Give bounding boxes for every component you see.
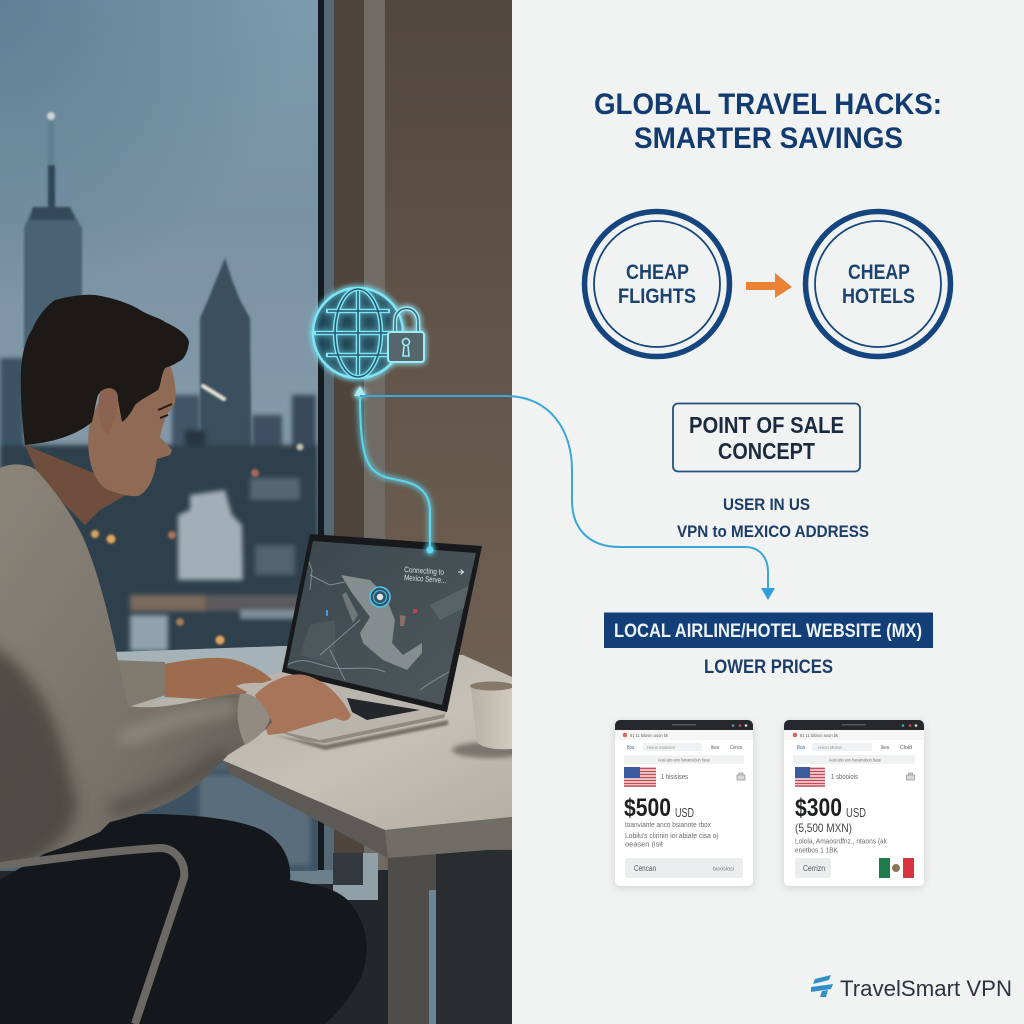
navigation row: Hoion Moitos — [818, 745, 843, 750]
map pins — [326, 609, 417, 626]
card: Mexico price — [784, 720, 924, 886]
head and face — [88, 364, 175, 496]
pale building — [130, 478, 315, 651]
browser bar — [784, 720, 924, 740]
flight detail: 1 sbooiois — [831, 774, 858, 781]
flight detail: 1 hisisises — [661, 774, 688, 781]
circle: cheap flights: CHEAP — [626, 261, 689, 284]
navigation row: Boa — [627, 745, 635, 751]
navigation row: Ikea — [881, 745, 890, 751]
fare description: Lobilu's clirinin ioi abiate cisa oj — [625, 831, 718, 840]
peso price: (5,500 MXN) — [795, 821, 852, 835]
text: user in US, VPN to Mexico address: VPN to MEXICO ADDRESS — [677, 522, 869, 541]
sweater shading — [0, 640, 235, 880]
status text — [404, 566, 446, 583]
laptop screen bezel — [282, 534, 482, 712]
navigation row: Cenca — [730, 745, 743, 751]
eye and brow — [158, 404, 172, 418]
status text: Connecting to — [404, 565, 445, 577]
laptop screen with map — [287, 541, 476, 705]
near hand — [255, 674, 351, 735]
location marker rings — [370, 587, 390, 607]
status text: Mexico Serve... — [404, 573, 446, 585]
browser bar: 81 11 bibisin aoon bk — [800, 733, 839, 738]
laptop — [153, 534, 485, 750]
near cuff — [238, 694, 270, 745]
ear — [98, 388, 118, 403]
browser bar — [615, 720, 753, 740]
wall and window frame — [0, 0, 512, 1024]
banner: local airline/hotel website: LOCAL AIRLINE/HOTEL WEBSITE (MX) — [614, 620, 922, 642]
navigation row — [627, 743, 743, 751]
price: $300 — [795, 794, 842, 822]
notice bar — [624, 755, 744, 764]
title: GLOBAL TRAVEL HACKS: — [594, 88, 942, 121]
footer bar — [625, 858, 743, 878]
chair arm — [0, 848, 184, 1024]
Baja peninsula — [342, 592, 358, 623]
icon: glowing globe with padlock — [313, 288, 424, 378]
box: point of sale concept — [673, 404, 860, 472]
footer bar: bisosiosi — [713, 866, 734, 872]
US flag — [624, 767, 656, 787]
circle: cheap hotels: HOTELS — [842, 285, 915, 308]
circle: cheap hotels — [806, 212, 950, 356]
navigation row: Ikea — [711, 745, 720, 751]
navigation row: Hoion Moitains — [647, 745, 676, 750]
footer button — [795, 858, 831, 878]
fare description: oeasen (isit — [625, 840, 664, 848]
keyboard — [347, 698, 420, 720]
city lights — [91, 444, 304, 644]
far hand — [160, 658, 272, 699]
coffee cup — [450, 682, 512, 760]
fare description — [795, 836, 887, 854]
globe — [313, 288, 403, 378]
text: user in US, VPN to Mexico address: USER IN US — [723, 495, 810, 514]
circle: cheap flights: FLIGHTS — [618, 285, 696, 308]
connection line: globe to local website — [360, 396, 775, 600]
banner: local airline/hotel website — [604, 612, 933, 648]
navigation row: Boa — [797, 745, 806, 751]
reflected light streak — [203, 386, 224, 399]
title — [594, 88, 942, 155]
price: USD — [846, 805, 866, 820]
logo: TravelSmart VPN: TravelSmart VPN — [840, 976, 1012, 1001]
view below desk — [140, 770, 318, 871]
fare description: Lolola, Amaosrdfnz., ntaons (ak — [795, 836, 887, 846]
laptop base — [153, 672, 447, 743]
sweater and near arm — [0, 464, 272, 868]
title: SMARTER SAVINGS — [634, 122, 903, 155]
circle: cheap flights — [584, 212, 730, 356]
notice bar: Aoal abo ann hanamabun baue — [829, 758, 881, 762]
laptop shadow — [275, 720, 448, 750]
card: US price — [615, 720, 753, 886]
notice bar: Aoal abo ann hanamabun baue — [658, 758, 710, 762]
hair — [21, 295, 189, 445]
panel: right background — [512, 0, 1024, 1024]
status arrow — [458, 570, 464, 574]
icon: logo mark — [811, 975, 833, 997]
price: USD — [675, 805, 694, 820]
padlock — [388, 308, 424, 362]
fare description: enetbos 1 1BK — [795, 846, 838, 854]
stepped tower — [198, 258, 252, 448]
far sleeve — [118, 660, 166, 706]
fare description: toanviante anco bsianote rbox — [625, 820, 711, 829]
box: point of sale concept: POINT OF SALE — [689, 412, 844, 438]
bag icon — [906, 773, 914, 780]
distant blocks — [0, 355, 318, 652]
fare description — [625, 820, 718, 848]
Mexican flag — [879, 858, 914, 878]
Mexico silhouette — [341, 575, 422, 670]
footer bar: Cencan — [634, 864, 656, 873]
circle: cheap hotels: CHEAP — [848, 261, 910, 284]
browser bar: 81 11 bibisin aoon bk — [630, 733, 669, 738]
map roads — [288, 561, 450, 690]
neck — [25, 445, 135, 525]
person — [0, 295, 367, 1024]
bag icon — [737, 773, 745, 780]
trousers — [0, 814, 367, 1024]
notice bar — [793, 755, 915, 764]
US flag — [795, 767, 825, 787]
footer button: Cerrizn — [803, 864, 825, 873]
price: $500 — [624, 794, 671, 822]
desk — [115, 646, 512, 1024]
navigation row — [797, 743, 912, 751]
text: lower prices: LOWER PRICES — [704, 657, 833, 678]
navigation row: Cloid — [900, 745, 912, 751]
connection line: laptop to globe — [354, 386, 434, 554]
arrow: flights to hotels — [746, 273, 792, 298]
box: point of sale concept: CONCEPT — [718, 438, 815, 464]
panel: photo of traveller at a window — [0, 0, 528, 1024]
text: user in US, VPN to Mexico address — [677, 495, 869, 541]
window view: city skyline at dusk — [0, 0, 320, 871]
tower with spire — [24, 112, 82, 350]
